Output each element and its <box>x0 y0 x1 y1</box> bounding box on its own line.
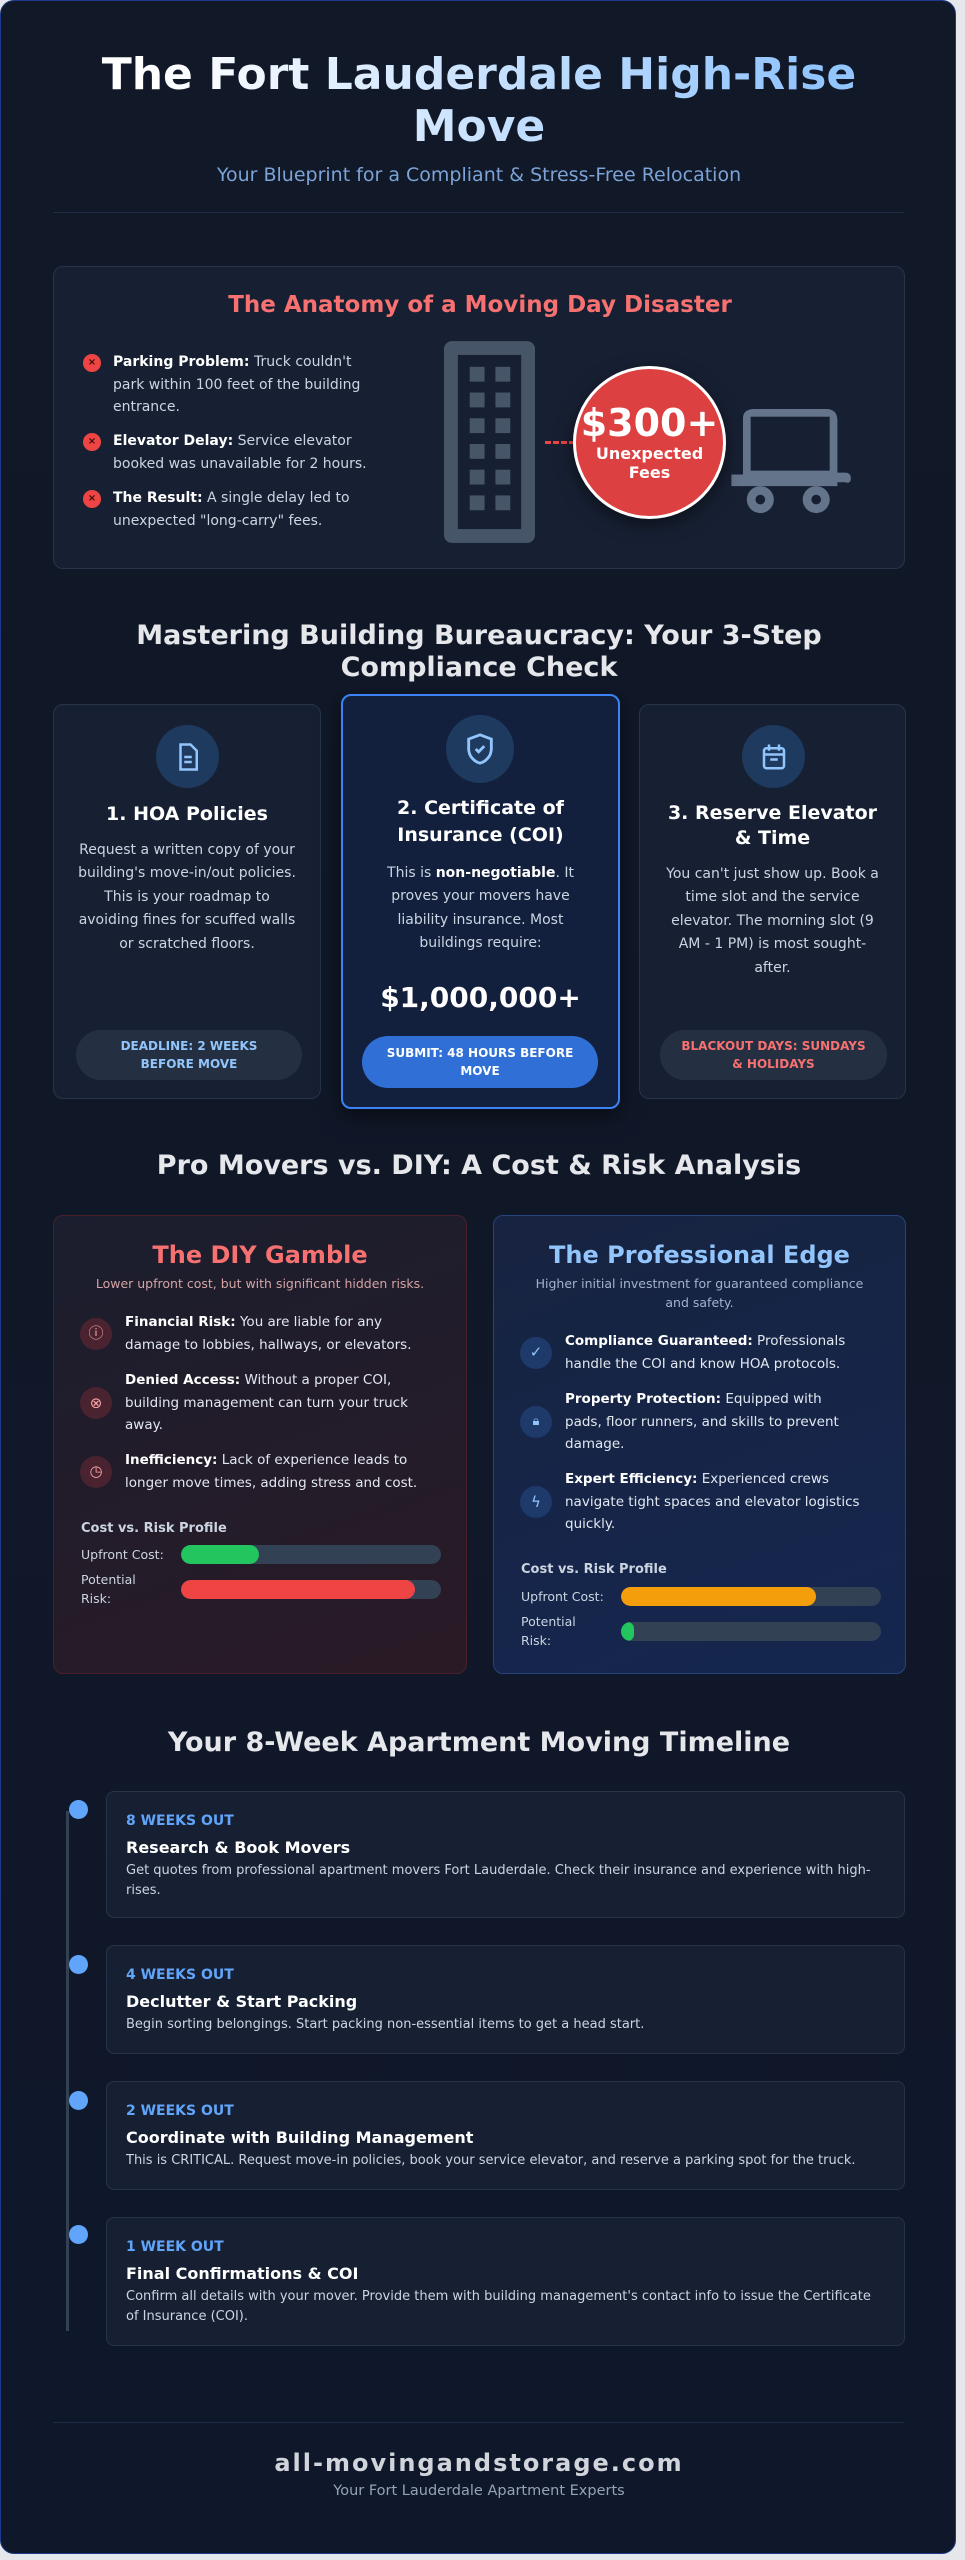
stat: $1,000,000+: $1,000,000+ <box>380 981 581 1014</box>
pill: deadline: DEADLINE: 2 WEEKS <box>121 1039 257 1053</box>
item: efficiency: ϟ <box>531 1492 541 1510</box>
panel: DIY gamble <box>53 1215 467 1674</box>
timeline <box>66 1791 905 2346</box>
callout: $300+ fees: Fees <box>629 463 670 482</box>
chart: pro cost vs risk: Potential <box>521 1614 576 1629</box>
step: 1 week <box>106 2217 905 2346</box>
chart: DIY cost vs risk: Potential <box>81 1572 136 1587</box>
title <box>21 49 937 153</box>
item: denied access: ⊗ <box>90 1394 102 1412</box>
pill: deadline: BEFORE MOVE <box>141 1057 237 1071</box>
step: 8 weeks: 8 WEEKS OUT <box>126 1813 234 1829</box>
callout: $300+ fees: Unexpected <box>596 444 703 463</box>
step: 1 week: Confirm all details with your mover. Provide them with building management's contact info to issue the Certificate of Insurance (COI). <box>126 2289 871 2324</box>
card: reserve elevator <box>639 704 906 1099</box>
item: protection: 🔒︎ <box>533 1414 539 1428</box>
chart: DIY cost vs risk: Risk: <box>81 1591 111 1606</box>
panel: professional edge <box>493 1215 906 1674</box>
pill: deadline <box>76 1030 302 1080</box>
chart: DIY cost vs risk: Upfront Cost: <box>81 1547 164 1562</box>
list: problems: × <box>88 357 96 368</box>
card: reserve elevator: & Time <box>735 827 810 849</box>
card: HOA policies: Request a written copy of your building's move-in/out policies. This is your roadmap to avoiding fines for scuffed walls or scratched floors. <box>78 842 296 952</box>
item: denied access: Denied Access: Without a proper COI, building management can turn your truck away. <box>125 1372 408 1433</box>
item: compliance: ✓ <box>530 1343 542 1361</box>
card: COI: 2. Certificate of <box>397 797 564 819</box>
step: 4 weeks <box>106 1945 905 2054</box>
card: COI: Insurance (COI) <box>397 824 564 846</box>
heading: compliance <box>136 620 822 683</box>
icon: shield <box>446 715 514 783</box>
pill: blackout: BLACKOUT DAYS: SUNDAYS <box>681 1039 866 1053</box>
card: reserve elevator: You can't just show up. Book a time slot and the service elevator. The morning slot (9 AM - 1 PM) is most sought-after. <box>666 866 879 976</box>
list: problems: The Result: A single delay led to unexpected "long-carry" fees. <box>113 490 350 528</box>
pill: blackout <box>660 1030 887 1080</box>
step: 4 weeks: Begin sorting belongings. Start packing non-essential items to get a head start. <box>126 2017 644 2032</box>
panel: professional edge: The Professional Edge <box>549 1241 850 1269</box>
heading: pro vs diy: Pro Movers vs. DIY: A Cost & Risk Analysis <box>157 1150 801 1181</box>
card: COI <box>341 694 620 1109</box>
card: reserve elevator: 3. Reserve Elevator <box>668 802 877 824</box>
heading: compliance: Compliance Check <box>341 652 617 683</box>
pill: blackout: & HOLIDAYS <box>732 1057 815 1071</box>
arrow: dashed <box>545 441 575 444</box>
item: financial risk: ⓘ <box>88 1324 104 1342</box>
step: 2 weeks: This is CRITICAL. Request move-in policies, book your service elevator, and reserve a parking spot for the truck. <box>126 2153 856 2168</box>
callout: $300+ fees <box>573 366 726 519</box>
chart: DIY cost vs risk <box>81 1521 441 1606</box>
panel: DIY gamble: Lower upfront cost, but with significant hidden risks. <box>96 1276 424 1291</box>
item: inefficiency: ◷ <box>89 1462 103 1480</box>
step: 1 week: 1 WEEK OUT <box>126 2239 224 2255</box>
pill: submit: SUBMIT: 48 HOURS BEFORE <box>387 1046 573 1060</box>
step: 4 weeks: 4 WEEKS OUT <box>126 1967 234 1983</box>
pill: submit: MOVE <box>460 1064 500 1078</box>
chart: DIY cost vs risk: Cost vs. Risk Profile <box>81 1521 227 1536</box>
step: 8 weeks: Research & Book Movers <box>126 1838 350 1857</box>
icon: calendar <box>742 725 805 788</box>
heading: timeline: Your 8-Week Apartment Moving Timeline <box>168 1727 790 1758</box>
step: 8 weeks <box>106 1791 905 1918</box>
panel: moving day disaster <box>53 266 905 569</box>
card: COI: This is non-negotiable. It proves your movers have liability insurance. Most buildings require: <box>387 865 574 951</box>
title: Move <box>413 101 545 152</box>
step: 1 week: Final Confirmations & COI <box>126 2264 358 2283</box>
panel: professional edge: Higher initial investment for guaranteed compliance and safety. <box>536 1276 863 1310</box>
chart: pro cost vs risk: Risk: <box>521 1633 551 1648</box>
footer: tagline: Your Fort Lauderdale Apartment Experts <box>333 2483 625 2499</box>
step: 2 weeks: Coordinate with Building Management <box>126 2128 473 2147</box>
footer: domain: all-movingandstorage.com <box>274 2449 684 2477</box>
list: problems: Parking Problem: Truck couldn't park within 100 feet of the building entrance. <box>113 354 360 415</box>
heading: compliance: Mastering Building Bureaucracy: Your 3-Step <box>136 620 822 651</box>
chart: pro cost vs risk: Upfront Cost: <box>521 1589 604 1604</box>
card: HOA policies: 1. HOA Policies <box>106 803 268 825</box>
chart: pro cost vs risk: Cost vs. Risk Profile <box>521 1562 667 1577</box>
list: problems: × <box>88 493 96 504</box>
step: 8 weeks: Get quotes from professional apartment movers Fort Lauderdale. Check their insurance and experience with high-rises. <box>126 1863 871 1898</box>
icon: document <box>156 725 219 788</box>
step: 4 weeks: Declutter & Start Packing <box>126 1992 357 2011</box>
card: HOA policies <box>53 704 321 1099</box>
title: The Fort Lauderdale High-Rise <box>102 49 856 100</box>
item: compliance: Compliance Guaranteed: Professionals handle the COI and know HOA protocols. <box>565 1333 845 1372</box>
item: protection: Property Protection: Equipped with pads, floor runners, and skills to prevent damage. <box>565 1391 839 1452</box>
list: problems: Elevator Delay: Service elevator booked was unavailable for 2 hours. <box>113 433 367 472</box>
step: 2 weeks: 2 WEEKS OUT <box>126 2103 234 2119</box>
list: problems <box>83 354 367 528</box>
pill: submit <box>362 1036 598 1088</box>
subtitle: Your Blueprint for a Compliant & Stress-Free Relocation <box>217 164 741 186</box>
list: problems: × <box>88 436 96 447</box>
callout: $300+ fees: $300+ <box>581 401 718 445</box>
item: financial risk: Financial Risk: You are liable for any damage to lobbies, hallways, or elevators. <box>125 1314 412 1352</box>
icon: cart <box>731 409 851 514</box>
item: inefficiency: Inefficiency: Lack of experience leads to longer move times, adding stress and cost. <box>125 1452 417 1490</box>
icon: building <box>444 341 535 543</box>
item: efficiency: Expert Efficiency: Experienced crews navigate tight spaces and elevator logistics quickly. <box>565 1471 860 1532</box>
step: 2 weeks <box>106 2081 905 2190</box>
chart: pro cost vs risk <box>521 1562 881 1648</box>
panel: DIY gamble: The DIY Gamble <box>152 1241 368 1269</box>
heading: disaster: The Anatomy of a Moving Day Disaster <box>228 292 732 318</box>
